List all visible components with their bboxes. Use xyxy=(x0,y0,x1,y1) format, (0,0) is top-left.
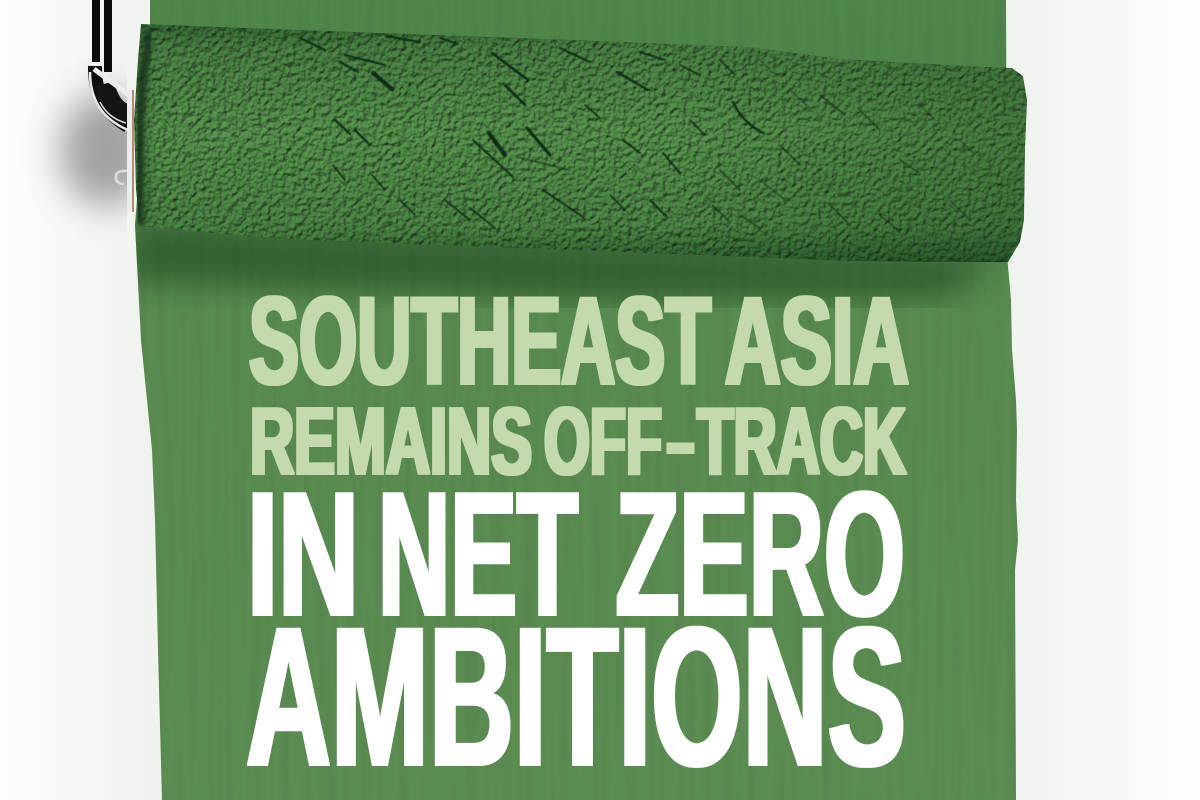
title line 3: IN xyxy=(247,455,359,653)
paint stripe xyxy=(120,0,1030,800)
title line 1: ASIA xyxy=(725,272,909,411)
title line 1: SOUTHEAST xyxy=(249,272,711,411)
title line 2 xyxy=(250,388,906,495)
title line 2: TRACK xyxy=(697,388,906,495)
roller cracks xyxy=(300,36,975,232)
roller left dark edge xyxy=(139,32,150,224)
title line 2: REMAINS xyxy=(250,388,532,495)
title line 2: OFF xyxy=(544,388,662,495)
shadow beneath roller xyxy=(130,222,1000,300)
icon: paint roller sleeve xyxy=(134,24,1027,262)
handle shadow on wall xyxy=(60,94,152,206)
title line 2: – xyxy=(667,388,694,495)
icon: roller handle xyxy=(90,0,134,212)
title xyxy=(246,272,909,800)
title line 3 xyxy=(247,455,905,653)
title line 3: NET xyxy=(378,455,578,653)
title line 3: ZERO xyxy=(616,455,905,653)
